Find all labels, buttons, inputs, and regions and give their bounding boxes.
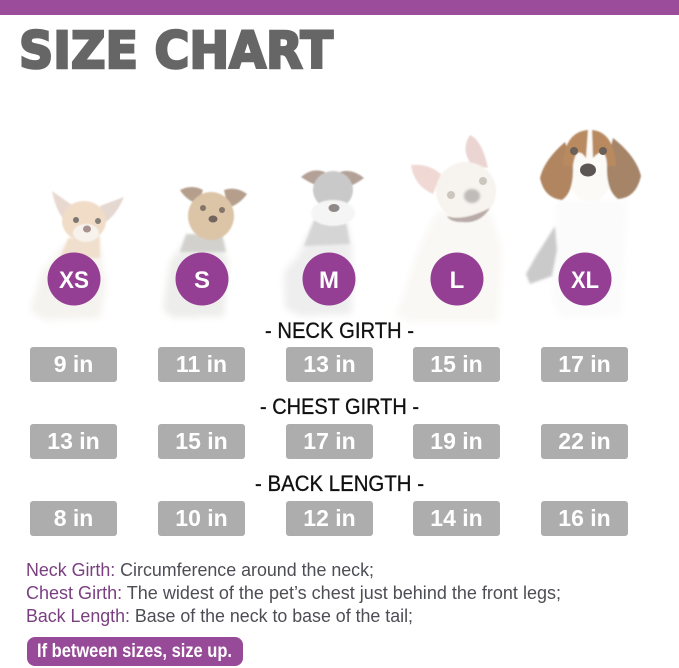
icon: M schnauzer	[284, 170, 364, 316]
icon: L french bulldog	[396, 135, 502, 322]
definition: back length: Back Length: Base of the neck to base of the tail;	[26, 606, 413, 626]
heading: back length: - BACK LENGTH -	[255, 471, 424, 496]
badge: XL: XL	[571, 267, 599, 294]
callout: size up note	[27, 637, 243, 666]
neck girth row: 17 in	[558, 351, 611, 377]
chest girth row: 22 in	[558, 428, 611, 454]
badge: XL	[558, 252, 612, 306]
back length row: 14 in	[430, 505, 483, 531]
chest girth row: 19 in	[430, 428, 483, 454]
badge: S	[176, 252, 228, 306]
badge: S: S	[194, 267, 210, 294]
badge: L	[430, 252, 484, 306]
badge: M: M	[319, 267, 339, 294]
neck girth row: 13 in	[303, 351, 356, 377]
back length row: 10 in	[175, 505, 228, 531]
neck girth row	[30, 347, 628, 382]
neck girth row: 9 in	[54, 351, 93, 377]
badge: XS: XS	[59, 267, 89, 294]
definition: chest girth: Chest Girth: The widest of the pet’s chest just behind the front legs;	[26, 583, 561, 603]
badge: L: L	[450, 267, 464, 294]
icon: XS chihuahua	[30, 191, 124, 320]
top banner	[0, 0, 679, 15]
back length row: 8 in	[54, 505, 93, 531]
chest girth row: 15 in	[175, 428, 228, 454]
icon: S yorkie	[163, 187, 247, 318]
heading: chest girth: - CHEST GIRTH -	[260, 394, 419, 419]
badge: M	[302, 252, 356, 306]
heading: neck girth: - NECK GIRTH -	[265, 318, 414, 343]
icon: XL beagle	[526, 130, 641, 318]
title: SIZE CHART	[19, 22, 333, 81]
neck girth row: 11 in	[176, 351, 227, 377]
neck girth row: 15 in	[430, 351, 483, 377]
back length row: 16 in	[558, 505, 611, 531]
badge: XS	[48, 252, 100, 306]
callout: size up note: If between sizes, size up.	[37, 641, 232, 662]
definition: neck girth: Neck Girth: Circumference around the neck;	[26, 560, 374, 580]
chest girth row	[30, 424, 628, 459]
chest girth row: 13 in	[47, 428, 100, 454]
back length row: 12 in	[303, 505, 356, 531]
chest girth row: 17 in	[303, 428, 356, 454]
back length row	[30, 501, 628, 536]
